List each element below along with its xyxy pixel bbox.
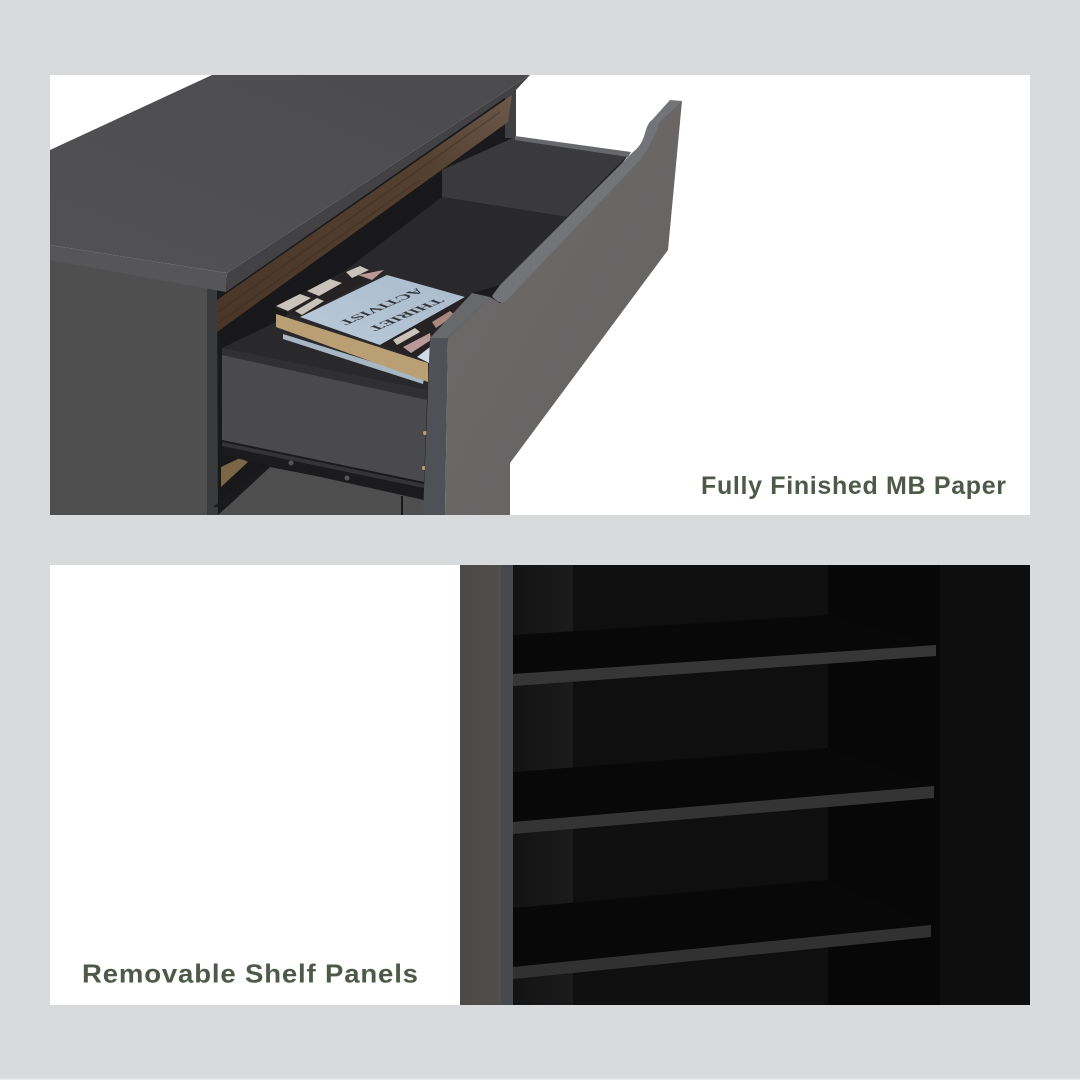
photo: open drawer cabinet <box>50 75 682 515</box>
book <box>274 266 472 384</box>
book striped back <box>274 273 342 313</box>
drawer inner side lip <box>222 348 427 400</box>
cabinet side panel <box>50 258 207 515</box>
shelf 2 top <box>513 748 934 822</box>
right back column <box>828 565 940 1005</box>
shelf 1 front <box>513 645 936 686</box>
book lower cover <box>283 334 424 384</box>
interior back <box>513 565 943 1005</box>
lower door <box>218 467 424 515</box>
cork edge <box>221 458 248 487</box>
rail highlight <box>222 442 424 488</box>
book title: THIRIET <box>363 297 448 332</box>
shelf 1 top <box>513 615 936 674</box>
rail <box>222 440 424 500</box>
pillar edge <box>501 565 513 1005</box>
cabinet top surface <box>50 75 530 273</box>
wood grain <box>218 112 500 323</box>
rail wedge <box>213 467 270 507</box>
side pillar <box>460 565 501 1005</box>
shelf 3 top <box>513 880 931 967</box>
interior shadow near wood <box>217 198 440 348</box>
lower opening <box>406 478 424 482</box>
photo: shelf interior <box>460 565 1030 1005</box>
shelf 2 <box>513 748 934 834</box>
back post <box>505 88 516 138</box>
drawer corner top <box>430 293 490 338</box>
panel: drawer photo <box>50 75 1030 515</box>
cabinet interior shadow <box>207 90 630 515</box>
drawer back wall <box>442 137 628 217</box>
shelf 2 front <box>513 786 934 834</box>
drawer floor <box>222 197 567 395</box>
caption: fully finished: Fully Finished MB Paper <box>701 472 1006 500</box>
caption: removable shelves: Removable Shelf Panels <box>82 959 418 988</box>
drawer front panel <box>445 101 682 515</box>
book title: ACTIVIST <box>334 287 428 326</box>
book title <box>340 288 445 332</box>
book spine stripes <box>380 297 465 345</box>
wood back panel <box>217 95 512 332</box>
shelf 3 <box>513 880 931 979</box>
drawer inner side panel <box>222 355 427 482</box>
shelf 3 front <box>513 925 931 979</box>
drawer front upper strip <box>492 100 682 302</box>
book pages <box>276 314 428 382</box>
bottom edge line <box>0 1078 1080 1080</box>
left back column <box>513 565 573 1005</box>
shelf 1 <box>513 615 936 686</box>
book cover <box>300 275 465 345</box>
drawer back rim <box>515 136 631 157</box>
door side <box>940 565 1030 1005</box>
stripes <box>276 266 369 315</box>
cabinet front frame <box>207 288 218 515</box>
door gap <box>401 496 403 515</box>
screws <box>288 460 294 466</box>
drawer front edge <box>423 338 448 515</box>
panel: shelves photo <box>50 565 1030 1005</box>
top front edge <box>50 245 227 292</box>
top side edge <box>226 75 530 292</box>
